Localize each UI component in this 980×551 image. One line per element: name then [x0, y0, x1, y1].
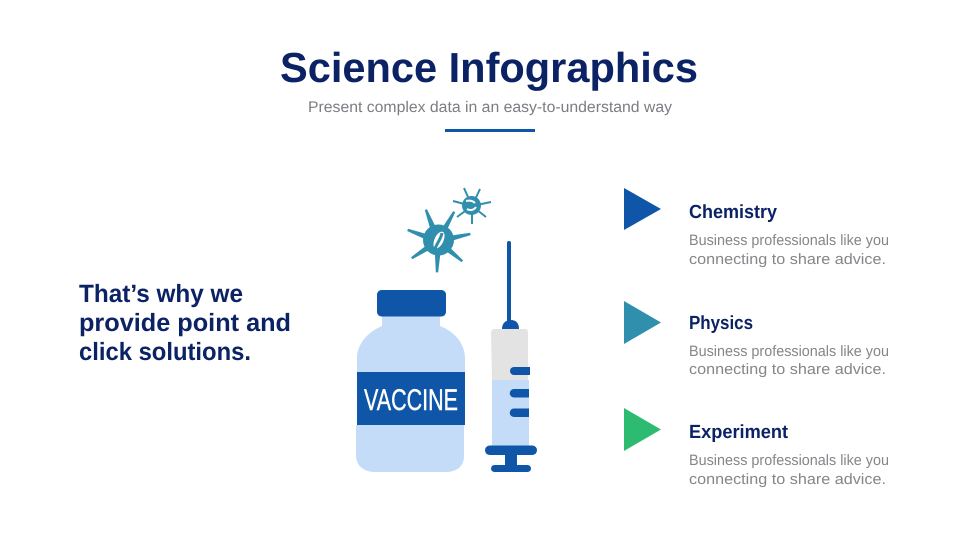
bottle label text: VACCINE — [364, 384, 458, 417]
barrel empty section — [491, 329, 528, 380]
item: physics — [624, 301, 889, 378]
item: chemistry — [624, 188, 889, 268]
body text: Business professionals like you — [689, 232, 889, 249]
body text — [689, 232, 889, 268]
tick marks — [510, 367, 530, 417]
body text — [689, 343, 889, 378]
body text — [689, 452, 889, 488]
heading: Chemistry — [689, 202, 777, 223]
icon: teal triangle — [624, 301, 661, 344]
statement text: That’s why we — [79, 280, 243, 308]
subtitle: Present complex data in an easy-to-understand way — [308, 99, 672, 116]
needle — [507, 241, 511, 323]
statement text: provide point and — [79, 309, 291, 337]
bottle body — [356, 314, 465, 472]
heading: Physics — [689, 313, 753, 334]
body text: Business professionals like you — [689, 343, 889, 360]
icon: syringe — [485, 241, 537, 472]
title: Science Infographics — [280, 44, 698, 91]
item: experiment — [624, 408, 889, 488]
statement text: click solutions. — [79, 338, 251, 366]
bottle cap — [377, 290, 446, 316]
icon: small virus — [453, 188, 491, 224]
body text: connecting to share advice. — [689, 361, 886, 378]
body text: connecting to share advice. — [689, 471, 886, 488]
statement text — [79, 280, 291, 366]
bottle label — [357, 372, 465, 425]
icon: large virus — [408, 210, 470, 272]
plunger — [485, 446, 537, 472]
icon: vaccine bottle — [356, 290, 465, 472]
body text: Business professionals like you — [689, 452, 889, 469]
body text: connecting to share advice. — [689, 251, 886, 268]
icon: green triangle — [624, 408, 661, 451]
title underline — [445, 129, 535, 132]
icon: blue triangle — [624, 188, 661, 230]
heading: Experiment — [689, 422, 789, 443]
needle hub — [502, 320, 519, 329]
barrel liquid section — [492, 380, 529, 447]
